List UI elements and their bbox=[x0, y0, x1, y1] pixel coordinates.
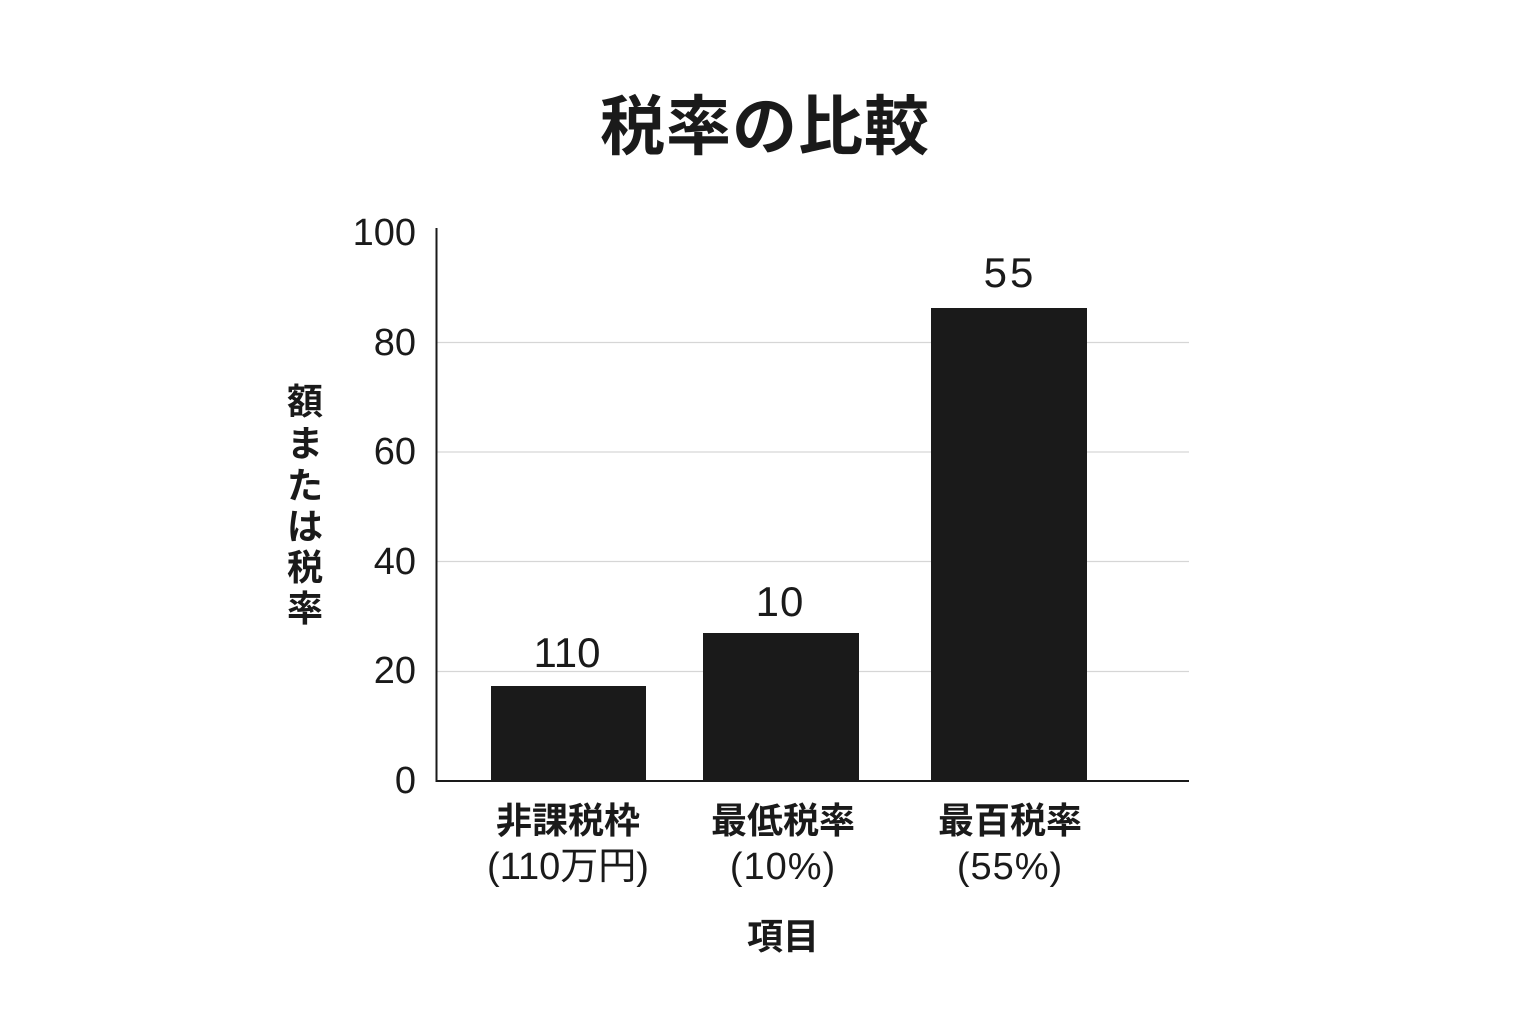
y axis title: は bbox=[287, 506, 323, 547]
category label: 非課税枠: 非課税枠 bbox=[496, 800, 640, 841]
category label: 非課税枠 bbox=[487, 800, 649, 888]
title: 税率の比較 bbox=[600, 90, 930, 163]
y axis tick labels: 0 bbox=[395, 760, 416, 802]
axes bbox=[436, 228, 1189, 781]
category label: 最低税率: (10%) bbox=[730, 846, 836, 888]
category label: 最低税率 bbox=[711, 800, 855, 888]
category label: 最百税率: (55%) bbox=[957, 846, 1063, 888]
value labels: 55 bbox=[984, 249, 1036, 296]
y axis title: た bbox=[287, 465, 323, 506]
category label: 最百税率 bbox=[938, 800, 1082, 888]
bar: 非課税枠 bbox=[491, 686, 646, 781]
y axis tick labels bbox=[353, 212, 416, 802]
y axis title: ま bbox=[287, 423, 323, 464]
y axis title bbox=[287, 381, 323, 629]
value labels bbox=[534, 249, 1036, 676]
y axis title: 額 bbox=[287, 381, 323, 422]
y axis tick labels: 20 bbox=[374, 650, 416, 692]
category label: 最低税率: 最低税率 bbox=[711, 800, 855, 841]
y axis tick labels: 40 bbox=[374, 541, 416, 583]
y axis title: 税 bbox=[287, 547, 323, 588]
category label: 最百税率: 最百税率 bbox=[938, 800, 1082, 841]
value labels: 110 bbox=[534, 629, 600, 676]
x axis title: 項目 bbox=[747, 916, 819, 957]
y axis tick labels: 60 bbox=[374, 431, 416, 473]
category label: 非課税枠: (110万円) bbox=[487, 846, 649, 888]
bar: 最百税率 bbox=[931, 308, 1087, 781]
bar: 最低税率 bbox=[703, 633, 859, 781]
value labels: 10 bbox=[756, 578, 804, 625]
y axis tick labels: 100 bbox=[353, 212, 416, 254]
y axis title: 率 bbox=[287, 588, 323, 629]
y axis tick labels: 80 bbox=[374, 322, 416, 364]
bar chart bbox=[353, 212, 1189, 802]
